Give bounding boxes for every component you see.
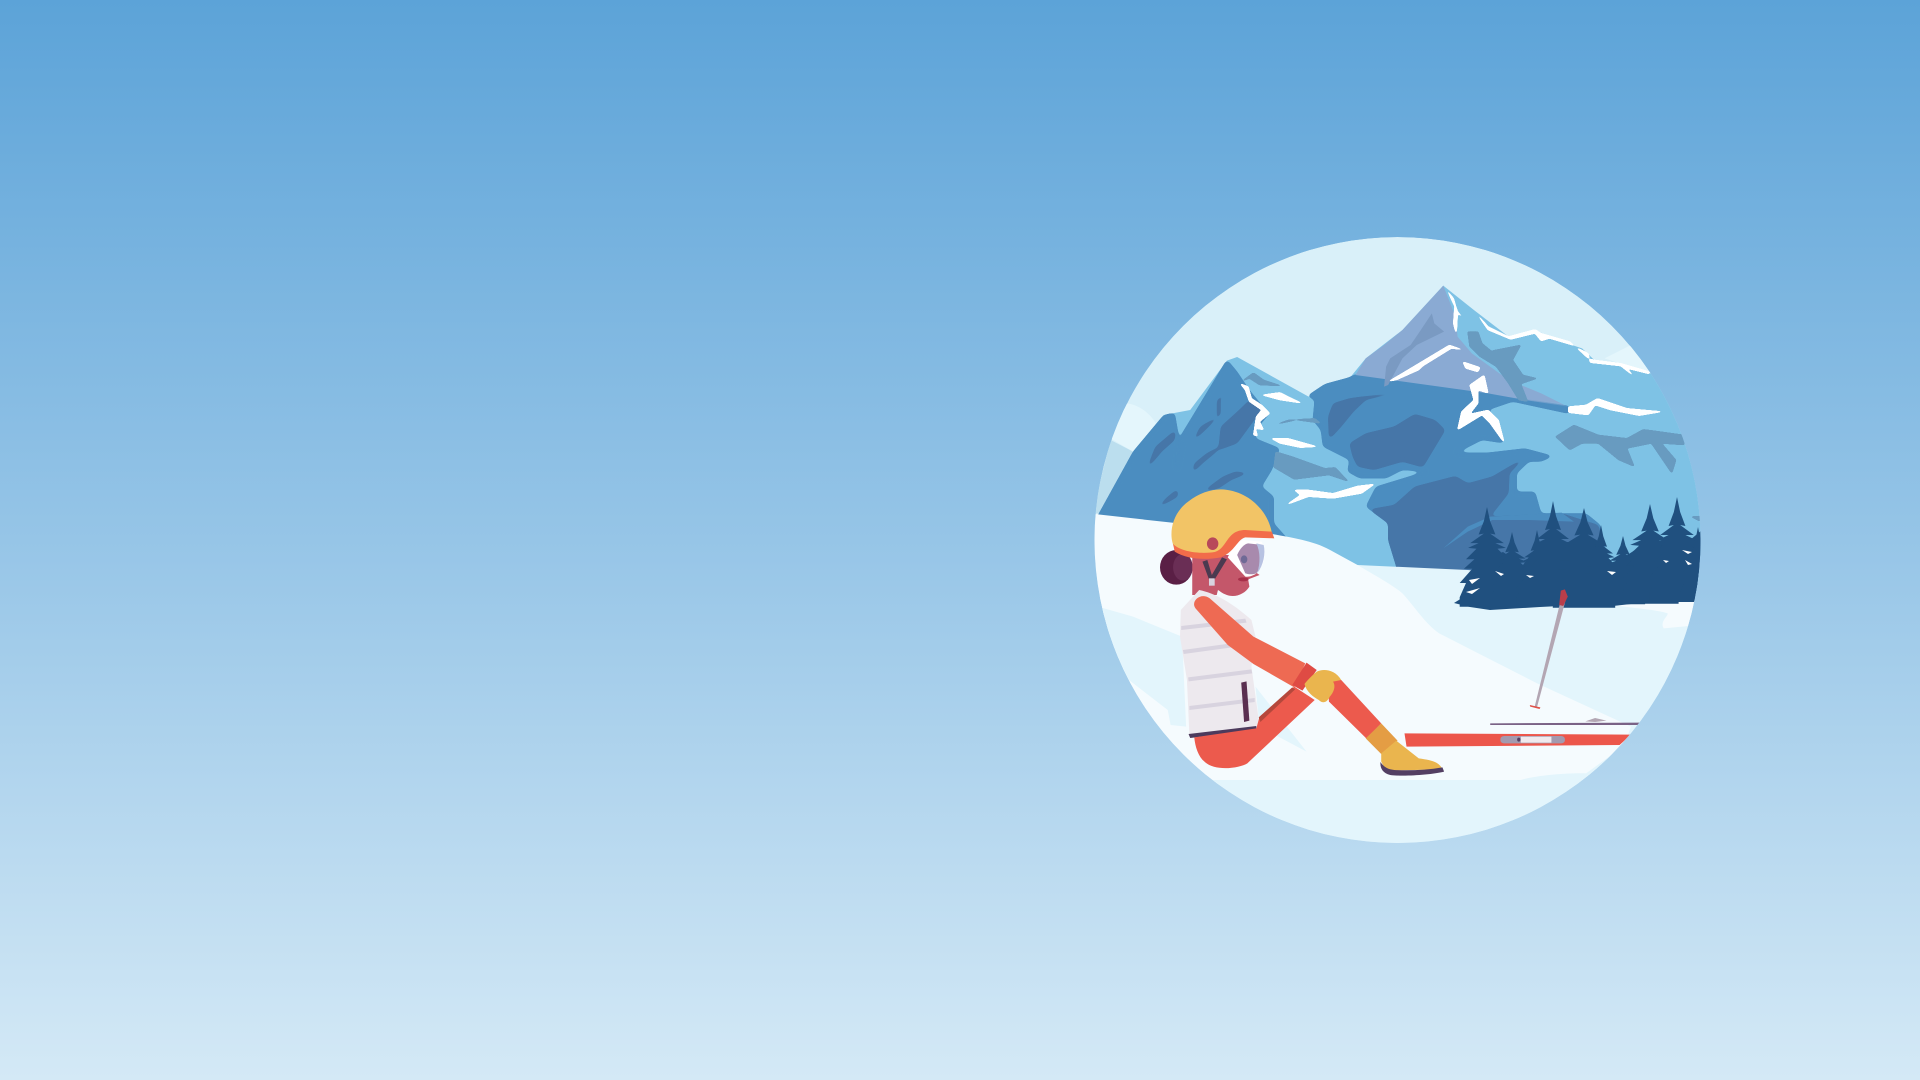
goggle strap — [1202, 557, 1227, 579]
neck and face — [1192, 555, 1260, 596]
strap tag — [1209, 578, 1215, 586]
tree line — [1454, 497, 1716, 610]
bottom pale snow — [1214, 757, 1608, 843]
leg — [1194, 677, 1381, 768]
cuff — [1292, 663, 1317, 691]
arm — [1194, 596, 1305, 687]
circular scene — [1094, 237, 1700, 843]
mountain range light base — [1132, 286, 1700, 567]
mountain dark shadows — [1150, 395, 1604, 570]
tree snow flecks — [1466, 550, 1692, 594]
goggles — [1228, 540, 1265, 577]
foreground snow slope — [1080, 514, 1631, 780]
peak lilac light — [1356, 286, 1568, 407]
grey-blue snow shadows — [1241, 332, 1700, 522]
helmet — [1171, 489, 1274, 559]
blue stripe on lower face — [1443, 513, 1574, 548]
skis — [1404, 718, 1641, 747]
illustration: skier in front of mountains — [1094, 237, 1700, 843]
peak shadow — [1384, 313, 1444, 387]
mid snowfield — [1094, 565, 1717, 830]
glove — [1304, 670, 1341, 702]
mountain mid-blue faces — [1097, 359, 1611, 573]
left pale snow patches — [1092, 605, 1307, 752]
white snow streaks — [1240, 287, 1663, 505]
vest — [1180, 590, 1260, 738]
sky — [1094, 237, 1700, 590]
boot — [1366, 723, 1444, 776]
hair bun — [1160, 550, 1193, 585]
skier — [1160, 489, 1641, 776]
ski pole — [1530, 589, 1568, 709]
far right snow drift — [1618, 596, 1696, 628]
back hills — [1092, 345, 1651, 513]
mouth — [1238, 577, 1249, 581]
mountains and snow — [1094, 286, 1700, 843]
